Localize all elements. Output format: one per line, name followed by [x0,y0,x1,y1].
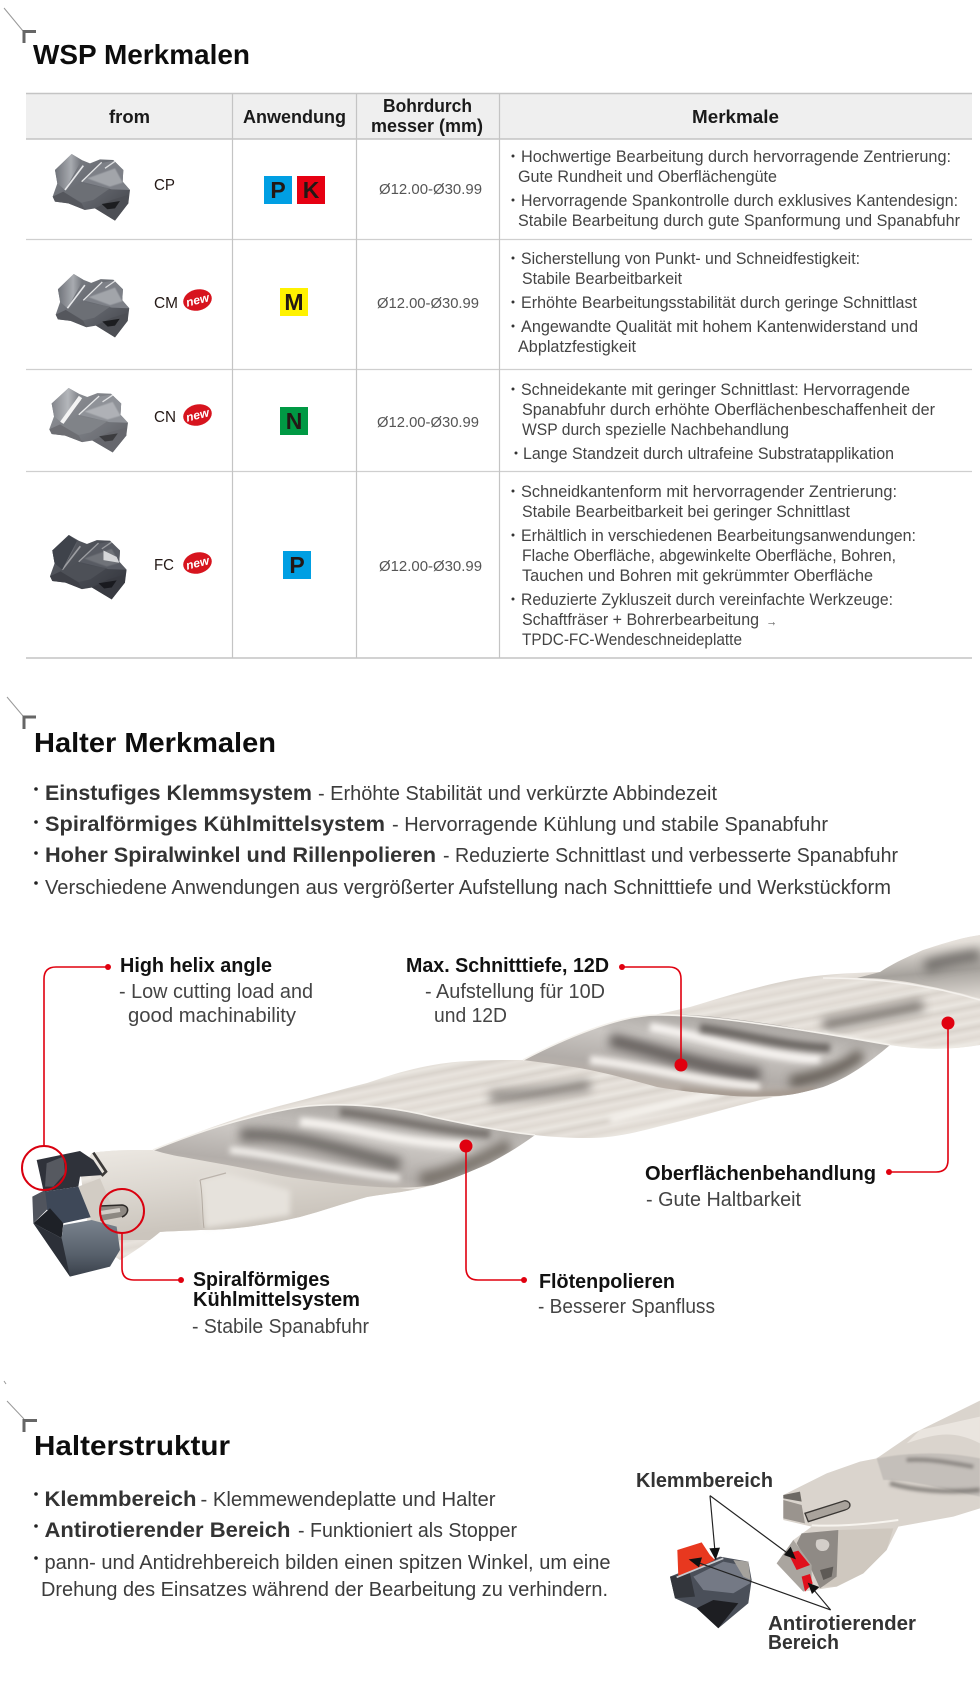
features text: Gute Rundheit und Oberflächengüte [518,168,777,186]
row: FC [50,483,916,649]
features text: Schneidekante mit geringer Schnittlast: Hervorragende [521,381,910,399]
icon: new badge: new [184,290,211,310]
callout: Max. Schnitttiefe: - Aufstellung für 10D [425,981,605,1003]
table header row: from [109,107,150,127]
structure list: Antirotierender Bereich [44,1518,290,1542]
icon: CM insert [56,274,129,337]
structure list: - Klemmewendeplatte und Halter [200,1489,496,1511]
callout: Flötenpolieren: Flötenpolieren [539,1271,675,1293]
row: CN [49,381,935,463]
badge: N: N [286,408,302,434]
feature list: - Reduzierte Schnittlast und verbesserte Spanabfuhr [443,845,898,867]
features text: Sicherstellung von Punkt- und Schneidfestigkeit: [521,250,860,268]
features text: Spanabfuhr durch erhöhte Oberflächenbeschaffenheit der [522,401,935,419]
label: Antirotierender Bereich [768,1613,916,1654]
table: WSP features [26,93,972,658]
icon: CN insert [49,388,128,452]
structure list [34,1487,610,1601]
features text: Erhöhte Bearbeitungsstabilität durch geringe Schnittlast [521,294,917,312]
structure list: pann- und Antidrehbereich bilden einen spitzen Winkel, um eine [44,1552,610,1574]
table header row: Merkmale [692,107,779,127]
features text [512,381,935,463]
features text: Abplatzfestigkeit [518,338,636,356]
badge: P [283,551,311,579]
callout: Oberflächenbehandlung: Oberflächenbehandlung [645,1163,876,1185]
icon: new badge: new [184,405,211,425]
icon: new badge [181,286,214,314]
label: Klemmbereich: Klemmbereich [636,1470,773,1492]
icon: new badge: new [184,553,211,573]
feature list: Verschiedene Anwendungen aus vergrößerter Aufstellung nach Schnitttiefe und Werkstückform [45,877,891,899]
feature list: - Erhöhte Stabilität und verkürzte Abbindezeit [318,783,717,805]
callout: Max. Schnitttiefe: und 12D [434,1005,507,1027]
feature list: Einstufiges Klemmsystem [45,781,312,805]
diameter range: Ø12.00-Ø30.99 [379,558,482,575]
table header row: Anwendung [243,107,346,127]
callout: High helix angle: - Low cutting load and [119,981,313,1003]
flute: middle [524,1014,890,1097]
label: CN: CN [154,409,176,426]
features text: Schaftfräser + Bohrerbearbeitung [522,611,759,629]
flute: lower [154,1106,534,1188]
drill insert [32,1151,120,1277]
label: FC: FC [154,557,174,574]
title: Halterstruktur: Halterstruktur [34,1430,230,1461]
table header row: Bohrdurch [383,96,472,116]
features text: Erhältlich in verschiedenen Bearbeitungsanwendungen: [521,527,916,545]
badge: P: P [289,552,305,578]
callout: Max. Schnitttiefe: Max. Schnitttiefe, 12D [406,955,609,977]
diameter range: Ø12.00-Ø30.99 [379,181,482,198]
table header row [26,93,972,139]
separate insert [670,1542,752,1628]
label: CM: CM [154,295,178,312]
corner mark [4,1381,37,1432]
features text: Tauchen und Bohren mit gekrümmter Oberfläche [522,567,873,585]
features text: Stabile Bearbeitung durch gute Spanformung und Spanabfuhr [518,212,960,230]
row: CM [56,250,918,356]
callout: High helix angle: High helix angle [120,955,272,977]
features text: TPDC-FC-Wendeschneideplatte [522,631,742,649]
features text [512,483,916,649]
label: CP: CP [154,177,175,194]
badge: M: M [284,289,304,315]
features text: Stabile Bearbeitbarkeit bei geringer Schnittlast [522,503,850,521]
features text: Flache Oberfläche, abgewinkelte Oberfläche, Bohren, [522,547,896,565]
callout: Flötenpolieren: - Besserer Spanfluss [538,1296,715,1318]
structure list: Drehung des Einsatzes während der Bearbeitung zu verhindern. [41,1579,608,1601]
coolant slot [100,1205,128,1221]
structure list: Klemmbereich [44,1487,196,1511]
diameter range: Ø12.00-Ø30.99 [377,414,479,431]
callout: Spiralförmiges Kühlmittelsystem: Spiralförmiges [193,1269,330,1291]
holder [777,1401,980,1592]
feature list: Spiralförmiges Kühlmittelsystem [45,812,385,836]
badge: M [280,288,308,316]
structure list: - Funktioniert als Stopper [298,1520,517,1542]
features text: Lange Standzeit durch ultrafeine Substratapplikation [523,445,894,463]
badges: P and K: K [303,177,320,203]
icon: new badge [181,549,214,577]
callout: Max. Schnitttiefe [406,955,688,1072]
drill illustration [32,920,980,1277]
badges: P and K [264,176,325,204]
features text: Reduzierte Zykluszeit durch vereinfachte Werkzeuge: [521,591,893,609]
arrows [689,1496,831,1610]
red contact areas on holder [788,1551,813,1592]
corner mark [7,697,36,729]
features text: Schneidkantenform mit hervorragender Zentrierung: [521,483,897,501]
features text: Hochwertige Bearbeitung durch hervorragende Zentrierung: [521,148,951,166]
label: Antirotierender Bereich: Bereich [768,1632,839,1654]
features text [512,250,918,356]
icon: FC insert [50,535,127,599]
panel: WSP Merkmalen section [4,8,972,658]
relief gash [200,1173,290,1228]
callout: High helix angle: good machinability [128,1005,296,1027]
feature list: - Hervorragende Kühlung und stabile Spanabfuhr [392,814,828,836]
row: CP [53,148,960,230]
panel: Halter Merkmalen section [7,697,980,1338]
callout: Spiralförmiges Kühlmittelsystem: Kühlmittelsystem [193,1289,360,1311]
diameter range: Ø12.00-Ø30.99 [377,295,479,312]
features text: Angewandte Qualität mit hohem Kantenwiderstand und [521,318,918,336]
callout: Spiralförmiges Kühlmittelsystem: - Stabile Spanabfuhr [192,1316,369,1338]
features text: Hervorragende Spankontrolle durch exklusives Kantendesign: [521,192,958,210]
callout: Oberflächenbehandlung [645,1016,954,1211]
features text: → [766,613,777,629]
callout: Oberflächenbehandlung: - Gute Haltbarkeit [646,1189,801,1211]
badges: P and K: P [270,177,286,203]
callout: Spiralförmiges Kühlmittelsystem [100,1189,369,1338]
features text [512,148,960,230]
feature list: Hoher Spiralwinkel und Rillenpolieren [45,843,436,867]
icon: new badge [181,401,214,429]
structure illustration [670,1401,980,1628]
features text: Stabile Bearbeitbarkeit [522,270,682,288]
label: Antirotierender Bereich: Antirotierender [768,1613,916,1635]
badge: N [280,407,308,435]
callout: High helix angle [22,955,313,1190]
feature list [34,781,898,899]
title: WSP Merkmalen: WSP Merkmalen [33,39,250,70]
corner mark [4,8,36,43]
table header row: messer (mm) [371,116,483,136]
title: Halter Merkmalen: Halter Merkmalen [34,727,276,758]
callout: Flötenpolieren [460,1140,715,1318]
icon: CP insert [53,154,130,221]
panel: Halterstruktur section [4,1381,980,1654]
features text: WSP durch spezielle Nachbehandlung [522,421,789,439]
